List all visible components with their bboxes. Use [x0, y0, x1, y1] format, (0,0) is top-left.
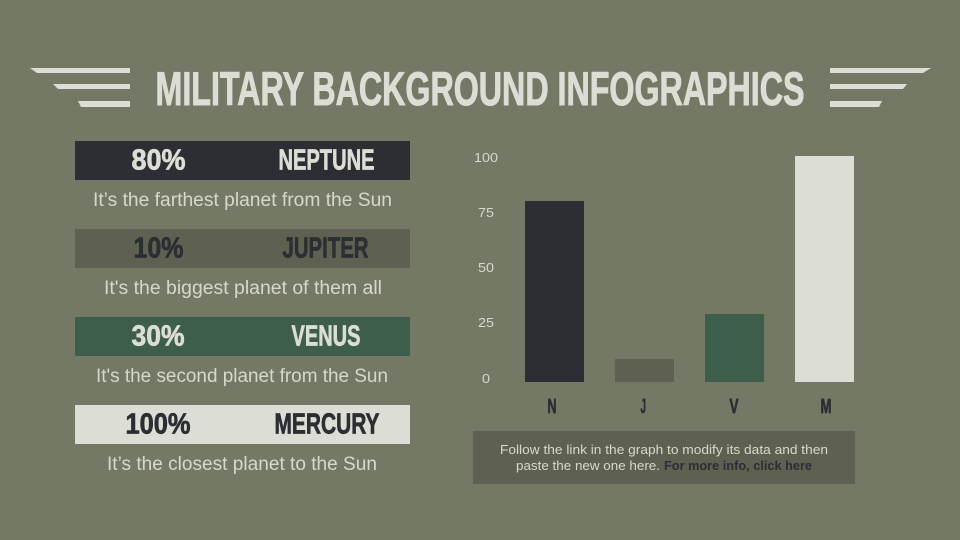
y axis labels: 50: [478, 260, 494, 275]
x axis labels: [548, 396, 832, 418]
bar: N: [525, 201, 584, 382]
Mercury description: It’s the closest planet to the Sun: [107, 454, 377, 475]
x axis labels: J: [640, 396, 646, 418]
x axis labels: M: [820, 396, 832, 418]
bar: V: [705, 314, 764, 382]
Venus name: VENUS: [292, 320, 360, 352]
y axis labels: [474, 150, 498, 386]
Mercury name: MERCURY: [274, 408, 380, 440]
Mercury percentage: 100%: [126, 408, 191, 440]
x axis labels: V: [730, 396, 739, 418]
Neptune percentage: 80%: [132, 144, 186, 176]
callout: chart note: [473, 431, 855, 484]
Jupiter name: JUPITER: [282, 232, 369, 264]
panel: Venus row: [75, 317, 410, 387]
panel: Jupiter row: [75, 229, 410, 299]
note line 2: paste the new one here.: [516, 458, 660, 473]
Jupiter description: It's the biggest planet of them all: [104, 278, 382, 299]
y axis labels: 25: [478, 315, 494, 330]
note background: [473, 431, 855, 484]
panel: Neptune row: [75, 141, 410, 211]
y axis labels: 75: [478, 205, 494, 220]
Neptune bar: [75, 141, 410, 180]
Mercury bar: [75, 405, 410, 444]
Venus description: It's the second planet from the Sun: [96, 366, 388, 387]
x axis labels: N: [548, 396, 556, 418]
Neptune name: NEPTUNE: [278, 144, 374, 176]
Neptune description: It’s the farthest planet from the Sun: [93, 190, 392, 211]
bar chart: [474, 150, 854, 418]
Venus bar: [75, 317, 410, 356]
icon: left wing stripes: [30, 68, 130, 107]
Venus percentage: 30%: [132, 320, 185, 352]
y axis labels: 0: [482, 371, 490, 386]
note line 1: Follow the link in the graph to modify its data and then: [500, 442, 828, 457]
note link: For more info, click here: [664, 458, 812, 473]
panel: planet list: [75, 141, 410, 475]
Jupiter percentage: 10%: [134, 232, 184, 264]
Jupiter bar: [75, 229, 410, 268]
bar: M: [795, 156, 854, 382]
panel: Mercury row: [75, 405, 410, 475]
y axis labels: 100: [474, 150, 498, 165]
bar: J: [615, 359, 674, 382]
icon: right wing stripes: [830, 68, 931, 107]
